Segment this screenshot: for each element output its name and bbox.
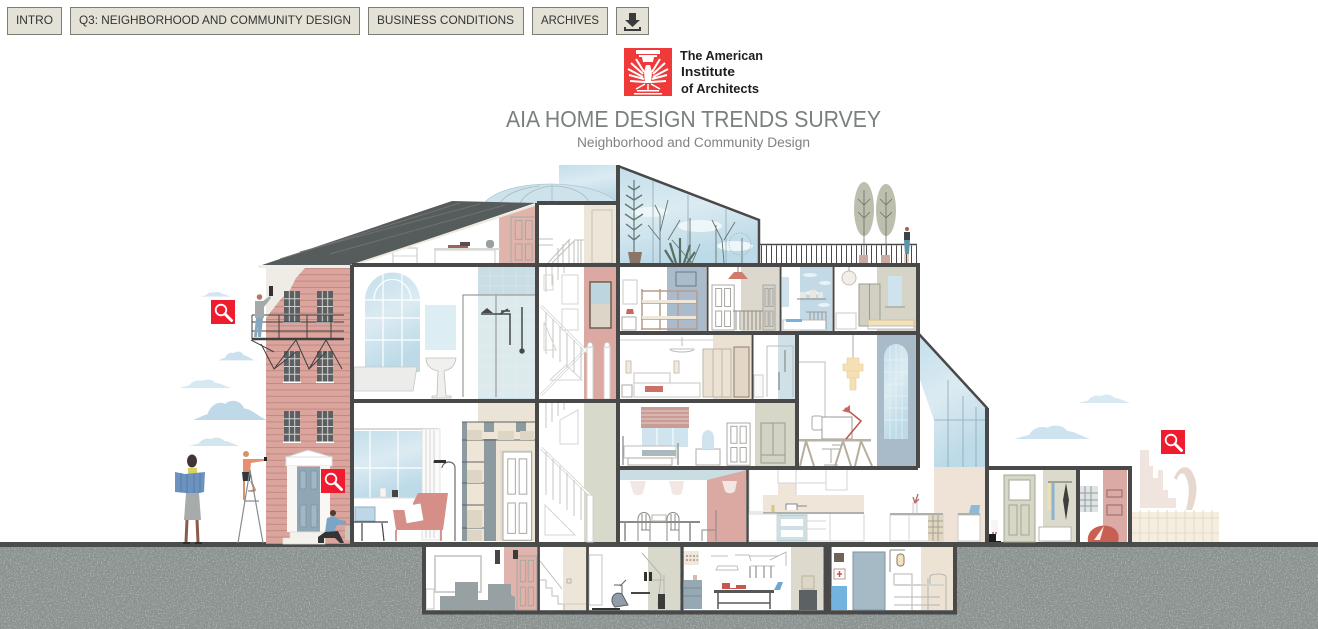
button: archives: ARCHIVES [541, 13, 599, 27]
button: business conditions [368, 8, 524, 34]
logo wordmark: The American [680, 48, 763, 63]
basement: gym [589, 547, 680, 610]
button: Q3 neighborhood and community design: Q3: NEIGHBORHOOD AND COMMUNITY DESIGN [79, 13, 351, 27]
illustration [0, 165, 1318, 629]
stairs: lower level [539, 403, 616, 542]
roof and attic [258, 201, 537, 268]
ruined wall [1140, 450, 1196, 510]
indoor trees [648, 200, 742, 263]
title: AIA HOME DESIGN TRENDS SURVEY [506, 106, 881, 132]
search icon: yard [1161, 430, 1185, 454]
woman holding map [175, 454, 205, 543]
basement: storm shelter [832, 547, 953, 610]
person on terrace [904, 227, 910, 263]
building facade [251, 268, 352, 544]
room: landing [709, 267, 780, 331]
room: side glass conservatory [918, 333, 987, 467]
room: guest bedroom [835, 267, 916, 331]
stairs: upper level [539, 267, 616, 399]
room: greenhouse [620, 168, 758, 263]
search icon: front door [321, 469, 345, 493]
attic room [349, 204, 537, 265]
button: Q3 neighborhood and community design [70, 8, 360, 34]
worker kneeling [318, 510, 352, 543]
clouds [179, 292, 1130, 446]
logo wordmark [680, 48, 763, 96]
terrace railing and trees [759, 182, 917, 264]
annex: mudroom [1080, 469, 1128, 542]
laptop on cabinet [958, 505, 980, 541]
basement: media room [425, 547, 538, 610]
framed picture [590, 282, 611, 328]
pendant lamp [843, 335, 863, 390]
front door and portico [283, 450, 332, 544]
living room window [354, 431, 422, 497]
room: living room [354, 403, 535, 542]
bathroom arched window [365, 272, 420, 372]
basement: stairway [540, 547, 586, 610]
logo mark [624, 48, 672, 96]
person on scaffold [254, 286, 273, 337]
fence and ruin [1131, 450, 1219, 542]
button: business conditions: BUSINESS CONDITIONS [377, 13, 514, 27]
desk and computer [798, 405, 872, 466]
button: download icon [616, 8, 648, 34]
structural walls [352, 165, 1130, 612]
subtitle: Neighborhood and Community Design [577, 135, 810, 150]
floor lamp [434, 461, 455, 541]
roman blind [641, 407, 689, 428]
basement [425, 547, 953, 610]
button: intro: INTRO [16, 13, 53, 27]
armchair [393, 493, 448, 541]
front door [1004, 475, 1035, 542]
kitchen island [890, 494, 943, 541]
room: bathroom [354, 267, 535, 399]
room: home office [798, 335, 916, 466]
room: bunk bedroom [620, 267, 707, 331]
arched window [884, 344, 908, 439]
room: upper bathroom [754, 335, 795, 399]
search icon: facade [211, 300, 235, 324]
logo wordmark: of Architects [681, 82, 759, 96]
basement: workshop [684, 547, 823, 610]
ground [0, 542, 1318, 629]
picket fence [1131, 510, 1219, 542]
room: dining room [620, 470, 747, 542]
navigation bar [8, 8, 648, 34]
potted fern [625, 180, 643, 263]
roof slope [262, 201, 535, 267]
back dome greenhouse [484, 165, 618, 203]
railing [759, 244, 917, 254]
logo: American Institute of Architects [624, 48, 763, 96]
logo wordmark: Institute [681, 65, 735, 79]
stairs: attic level [539, 205, 616, 263]
scaffold [251, 315, 344, 369]
annex: hallway [989, 469, 1078, 542]
button: archives [532, 8, 608, 34]
room: master bedroom [620, 335, 752, 399]
bookcase [462, 422, 535, 541]
room: nursery [782, 267, 833, 331]
terrace trees [854, 182, 896, 264]
room: kitchen [749, 467, 985, 542]
button: intro [8, 8, 62, 34]
person on ladder [238, 451, 267, 543]
room: third bedroom [620, 403, 795, 466]
facade windows [283, 291, 334, 443]
boots and umbrellas [989, 520, 1001, 542]
